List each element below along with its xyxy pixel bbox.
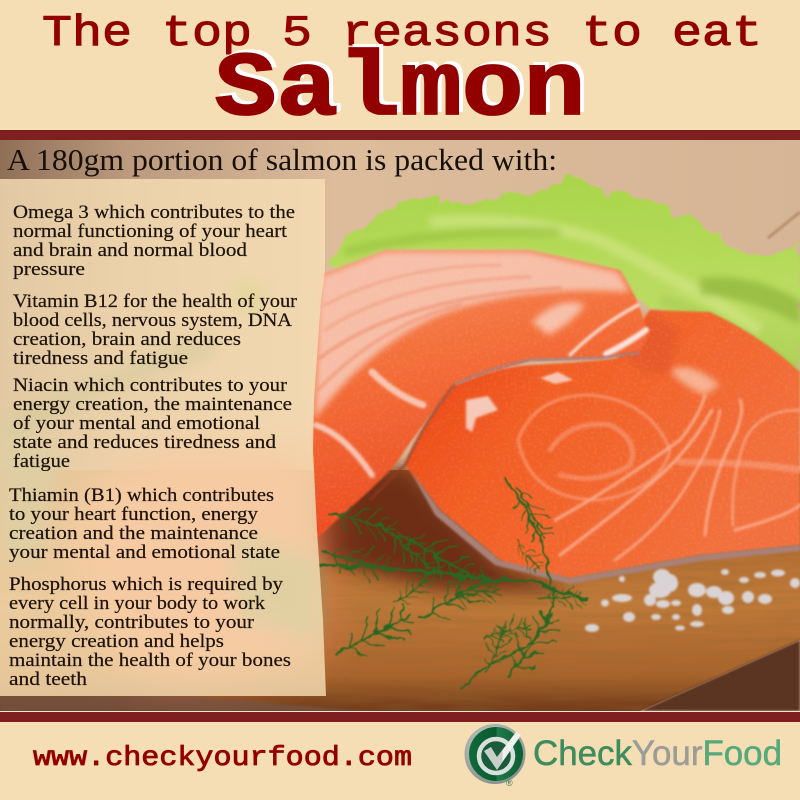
text block: Omega 3: Omega 3 which contributes to the — [13, 203, 295, 223]
photo: salmon fillets on a wooden board — [0, 140, 800, 715]
text block: Phosphorus: every cell in your body to work — [9, 594, 266, 614]
text block: Thiamin: Thiamin (B1) which contributes — [9, 486, 274, 506]
shadow under fillets — [300, 465, 575, 590]
text block: Niacin — [13, 376, 292, 472]
text block: Thiamin: your mental and emotional state — [9, 543, 280, 563]
text block: Thiamin: to your heart function, energy — [9, 505, 259, 525]
text block: Vitamin B12: Vitamin B12 for the health of your — [13, 292, 297, 312]
title line: The top 5 reasons to eat — [42, 9, 762, 59]
fish speckle texture — [310, 245, 800, 585]
background wood plank edge — [768, 212, 800, 238]
text block: Phosphorus — [9, 575, 291, 690]
text block: Vitamin B12: creation, brain and reduces — [13, 330, 241, 350]
cutting board — [0, 470, 800, 715]
text block: Omega 3: normal functioning of your heart — [13, 222, 288, 242]
heading: Salmon: Salmon — [219, 36, 589, 139]
blurred greenery behind panel — [0, 275, 320, 640]
bottom divider bar — [0, 711, 800, 722]
lettuce leaf — [328, 174, 800, 390]
text block: Phosphorus: normally, contributes to your — [9, 613, 254, 633]
text block: Thiamin — [9, 486, 280, 563]
lower salmon fillet — [405, 310, 800, 584]
text block: Thiamin: creation and the maintenance — [9, 524, 258, 544]
registered mark: ® — [506, 778, 513, 788]
upper salmon fillet — [312, 250, 648, 540]
text block: Phosphorus: Phosphorus which is required by — [9, 575, 284, 595]
sub-heading: A 180gm portion of salmon is packed with: — [7, 142, 557, 177]
website url: www.checkyourfood.com — [33, 742, 412, 774]
blurred fillet behind panel — [70, 445, 320, 677]
text block: Niacin: state and reduces tiredness and — [13, 433, 277, 453]
text block: Phosphorus: maintain the health of your bones — [9, 651, 291, 671]
text block: Niacin: fatigue — [13, 452, 70, 472]
logo wordmark: CheckYourFood — [533, 734, 782, 773]
icon: CheckYourFood logo badge — [464, 724, 526, 784]
sea salt crystals — [585, 569, 800, 632]
text block: Omega 3 — [13, 203, 295, 280]
top divider bar — [0, 130, 800, 140]
heading: Salmon: Salmon — [215, 39, 585, 142]
panel: nutrients backdrop — [0, 179, 326, 696]
text block: Omega 3: pressure — [13, 260, 85, 280]
text block: Vitamin B12: tiredness and fatigue — [13, 349, 188, 369]
text block: Niacin: energy creation, the maintenance — [13, 395, 292, 415]
text block: Vitamin B12 — [13, 292, 297, 369]
text block: Omega 3: and brain and normal blood — [13, 241, 248, 261]
dill sprig — [318, 478, 587, 688]
text block: Phosphorus: and teeth — [9, 670, 87, 690]
text block: Vitamin B12: blood cells, nervous system, DNA — [13, 311, 293, 331]
text block: Niacin: of your mental and emotional — [13, 414, 260, 434]
lettuce shading — [345, 220, 800, 375]
text block: Phosphorus: energy creation and helps — [9, 632, 224, 652]
text block: Niacin: Niacin which contributes to your — [13, 376, 287, 396]
table background — [0, 140, 800, 711]
